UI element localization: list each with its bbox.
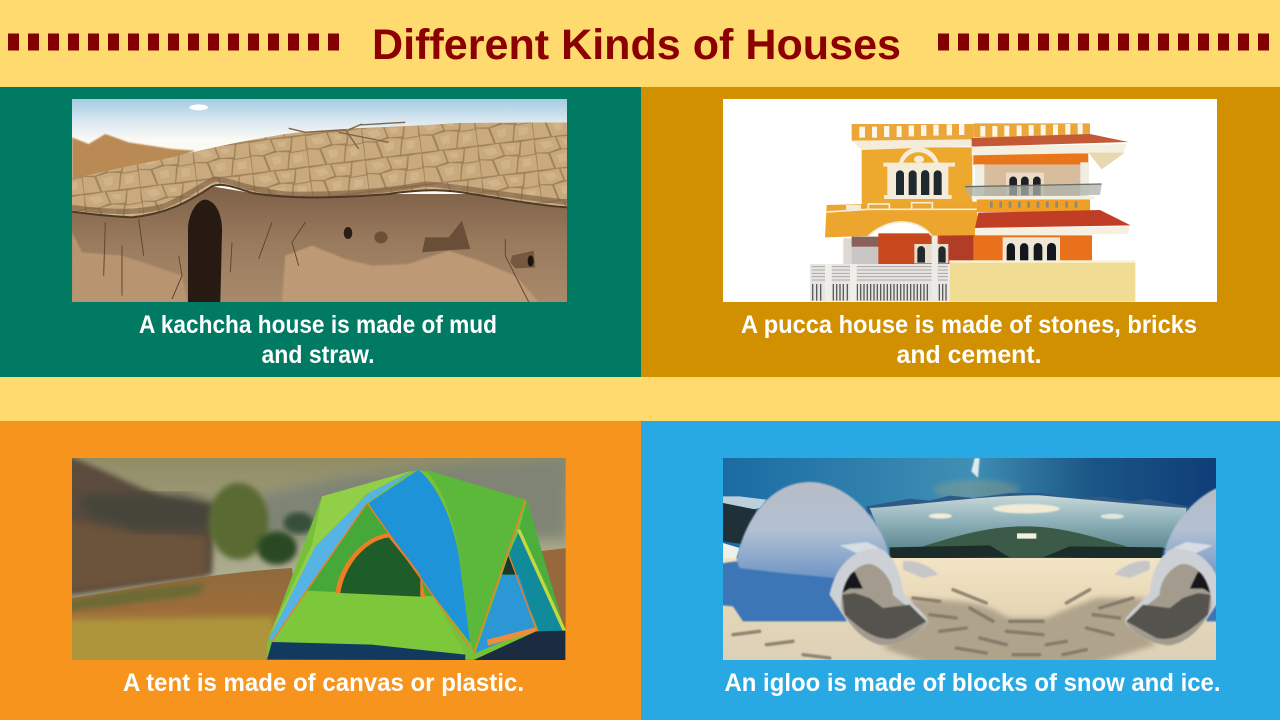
caption: A kachcha house is made of mud	[139, 311, 497, 339]
caption: A tent is made of canvas or plastic.	[123, 669, 524, 697]
caption: and straw.	[262, 341, 374, 369]
panel: igloo	[641, 421, 1280, 720]
photo: tent	[72, 458, 566, 660]
photo: mud house	[72, 99, 567, 302]
caption: and cement.	[896, 341, 1042, 369]
photo: pucca house	[810, 123, 1135, 302]
panel: kachcha house	[0, 87, 641, 377]
header band	[0, 0, 1280, 87]
panel: pucca house	[641, 87, 1280, 377]
panel: tent	[0, 421, 641, 720]
caption: An igloo is made of blocks of snow and ice.	[724, 669, 1220, 697]
photo background	[723, 99, 1217, 302]
right dashed ornament	[938, 34, 1270, 50]
photo: igloo	[723, 458, 1216, 660]
title: Different Kinds of Houses	[372, 21, 901, 69]
left dashed ornament	[8, 34, 340, 50]
caption: A pucca house is made of stones, bricks	[741, 311, 1197, 339]
